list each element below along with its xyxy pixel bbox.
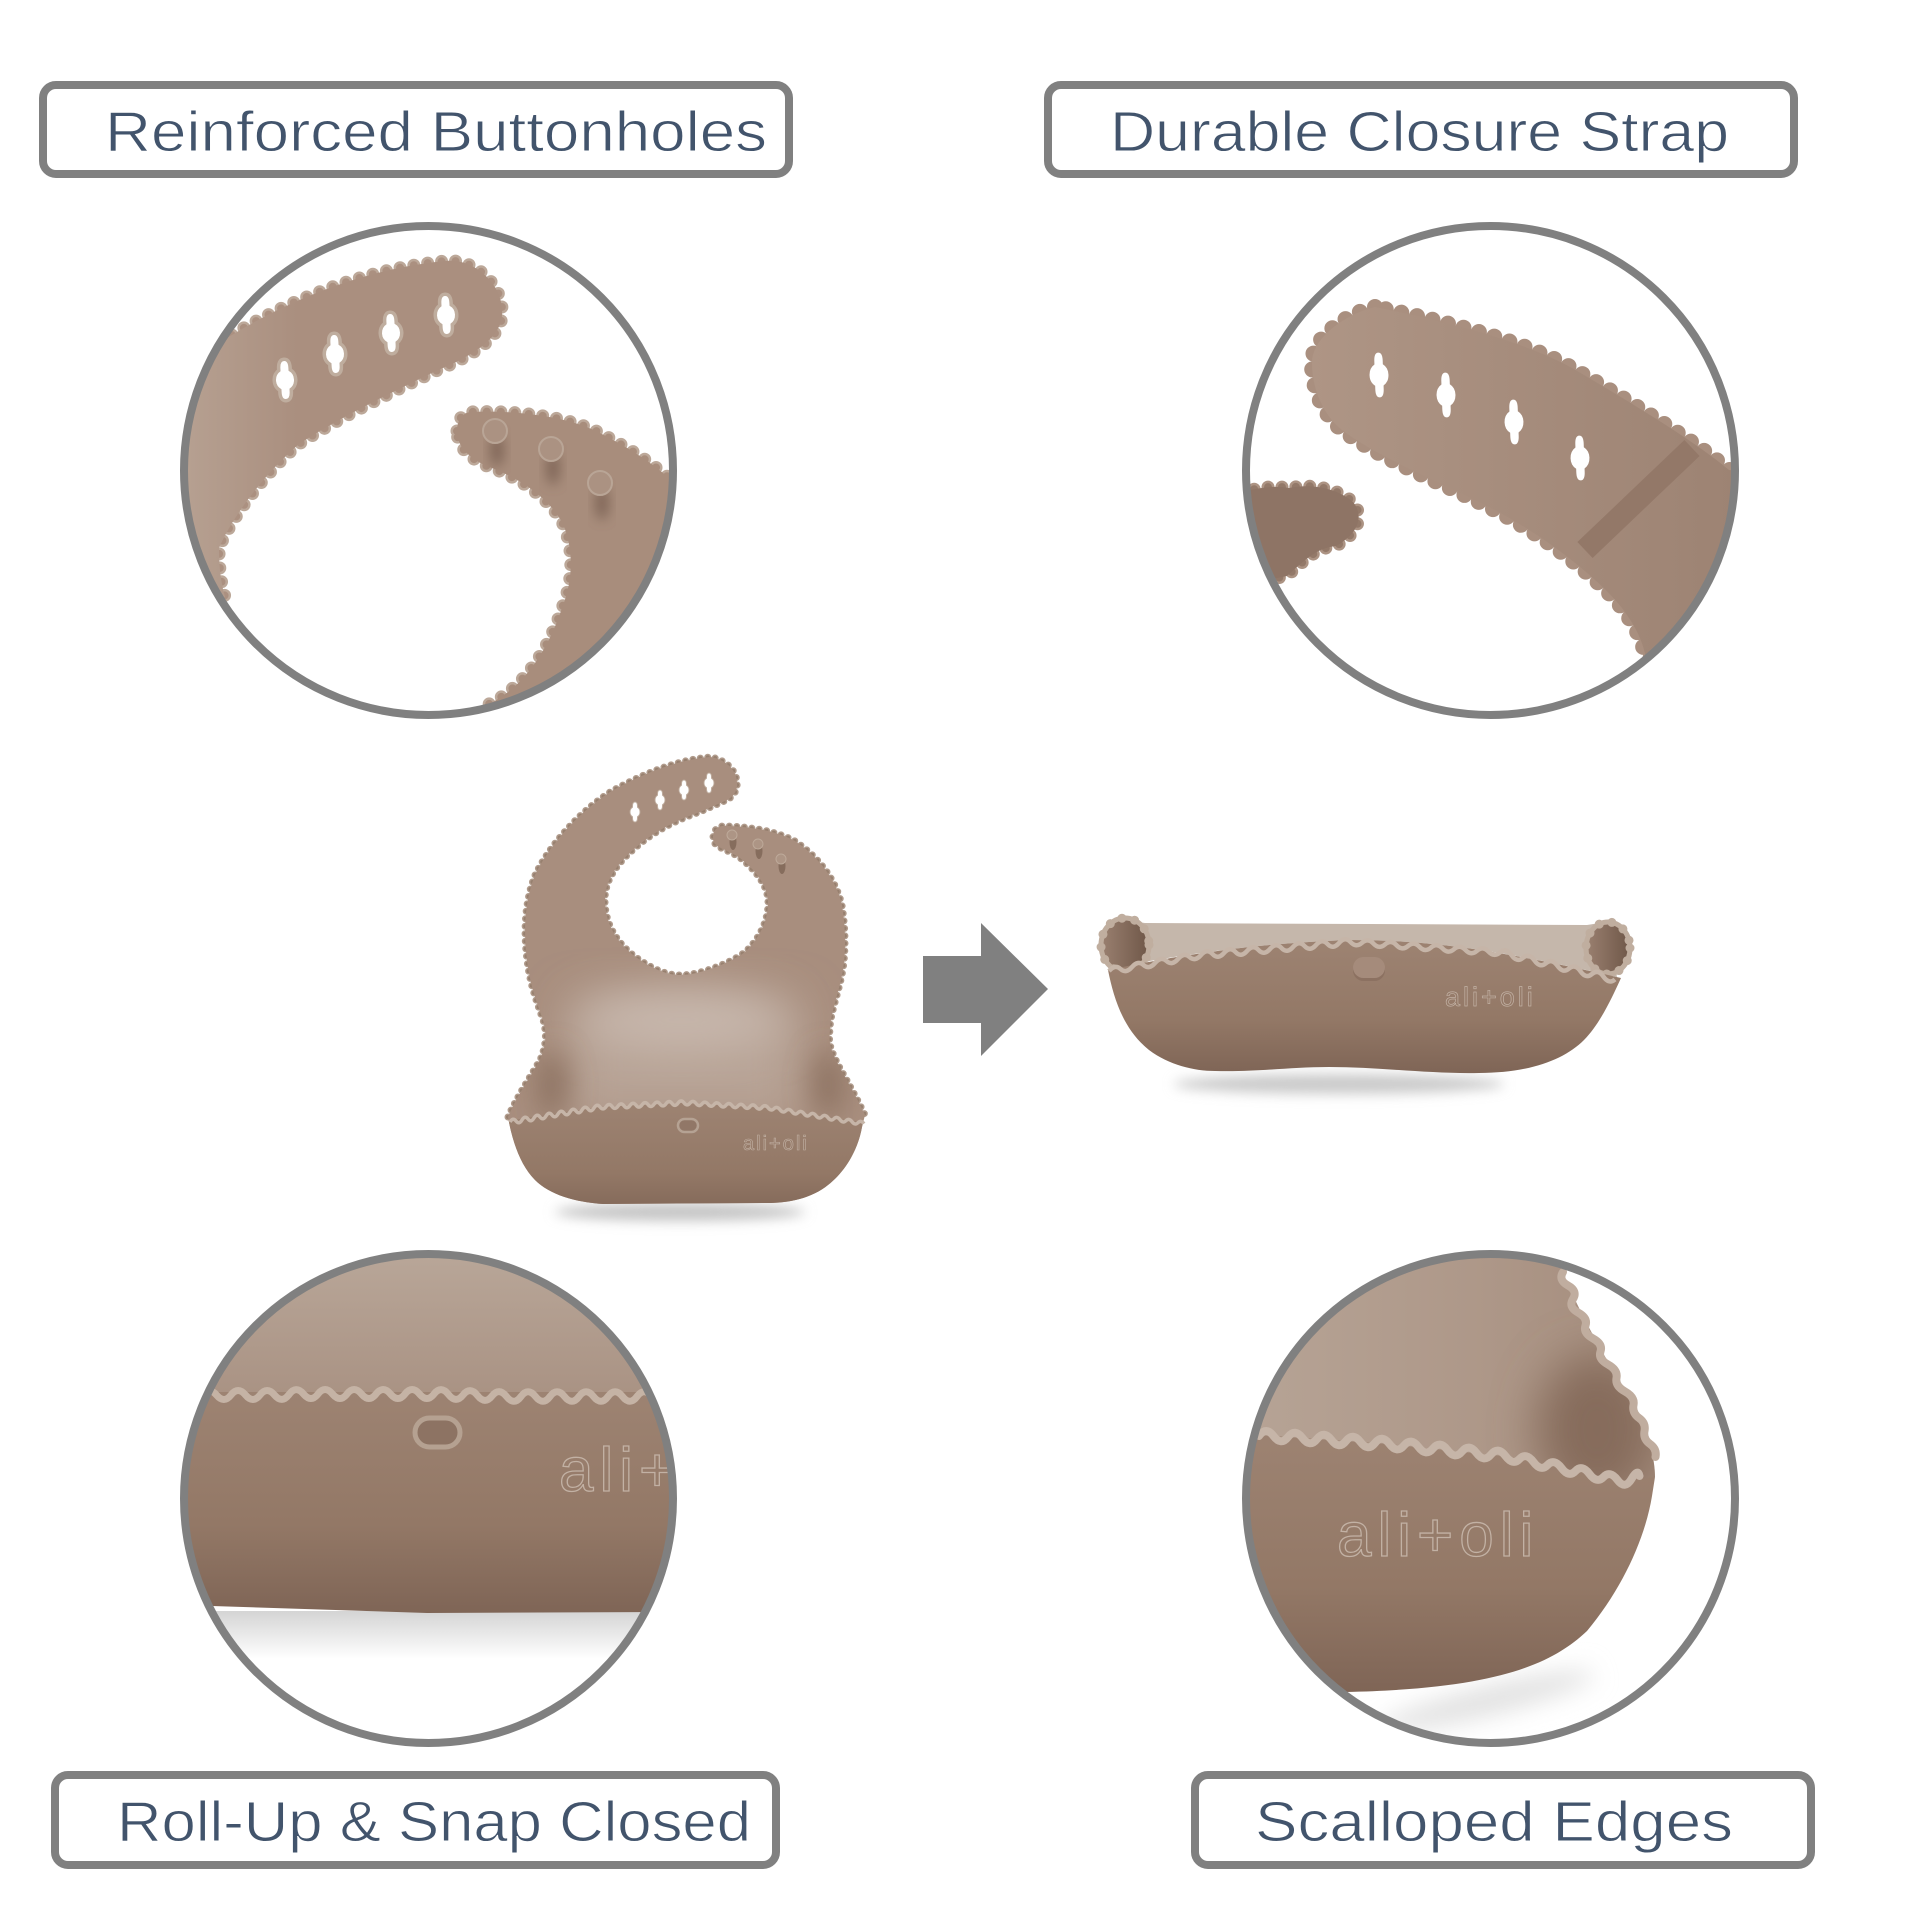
rolled bib right opening [1586, 922, 1630, 974]
bib shadow [555, 1203, 805, 1221]
strap with slots [1312, 307, 1757, 658]
rolled bib body [1108, 940, 1621, 1073]
label: Reinforced Buttonholes [43, 85, 789, 174]
bib studs [727, 830, 786, 874]
bib fold scallop [510, 1101, 864, 1124]
upper bib surface [214, 1258, 642, 1392]
arrow [923, 923, 1048, 1056]
panel: roll-up and snap close-up circle [180, 1250, 677, 1747]
rolled bib snap [1353, 957, 1385, 981]
label: Durable Closure Strap: Durable Closure Strap [1110, 100, 1729, 164]
label: Roll-Up & Snap Closed [55, 1775, 776, 1865]
upper bib surface [1260, 1258, 1655, 1481]
scalloped fold [202, 1390, 652, 1401]
rolled bib left opening [1101, 918, 1149, 972]
label: Reinforced Buttonholes: Reinforced Buttonholes [105, 100, 767, 164]
rolled bib logo: ali+oli [1445, 982, 1536, 1012]
panel: closure strap close-up circle [1227, 226, 1757, 715]
lower bib surface [177, 1392, 677, 1613]
shadow under bib [216, 1611, 640, 1650]
bib shading [500, 990, 880, 1220]
panel: central rolled bib [1101, 918, 1630, 1094]
bib snap slot [678, 1119, 698, 1132]
side scalloped edge [1561, 1272, 1656, 1457]
bib logo: ali+oli [743, 1133, 809, 1155]
bib buttonholes [630, 774, 714, 822]
label: Roll-Up & Snap Closed: Roll-Up & Snap Closed [117, 1790, 751, 1854]
panel: buttonholes close-up circle [180, 222, 677, 719]
label: Scalloped Edges [1195, 1775, 1811, 1865]
strap with buttonholes [188, 254, 508, 602]
panel: scalloped edges close-up circle [1197, 1239, 1735, 1743]
embossed logo: ali+oli [559, 1436, 761, 1505]
rolled bib scallop [1109, 939, 1615, 981]
label: Durable Closure Strap [1048, 85, 1794, 174]
rolled bib shadow [1174, 1074, 1504, 1094]
strap end fragment [1250, 480, 1364, 584]
snap slot [415, 1418, 460, 1447]
lower bib surface [1250, 1436, 1655, 1692]
bib scalloped edge [508, 757, 865, 1117]
rolled bib inner band [1111, 920, 1617, 977]
embossed logo: ali+oli [1337, 1501, 1539, 1570]
label: Scalloped Edges: Scalloped Edges [1255, 1790, 1733, 1854]
horizontal scalloped fold [1259, 1431, 1640, 1485]
shadow under bib [1389, 1666, 1588, 1733]
panel: central open bib [500, 757, 880, 1221]
strap end with studs [450, 405, 669, 705]
bib body [508, 757, 865, 1204]
